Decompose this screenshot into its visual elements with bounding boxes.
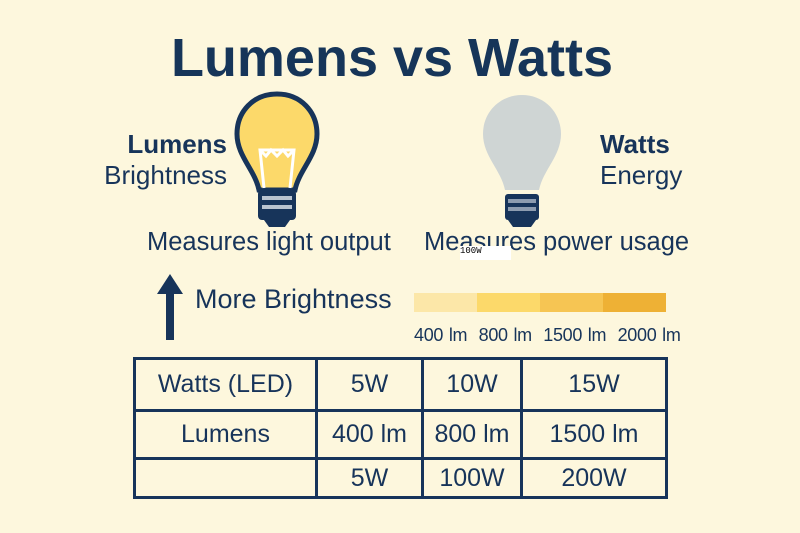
table: 400 lm xyxy=(332,420,407,448)
table xyxy=(133,357,668,499)
label: lumens brightness xyxy=(104,129,227,190)
table: 100W xyxy=(439,464,505,492)
title: Lumens vs Watts xyxy=(171,28,613,88)
table: 1500 lm xyxy=(550,420,638,448)
label: watts energy xyxy=(600,129,682,190)
table: 200W xyxy=(561,464,627,492)
label: lumens brightness: Lumens xyxy=(127,129,227,159)
label: lumens brightness: Brightness xyxy=(104,160,227,190)
table: 5W xyxy=(351,464,388,492)
icon: yellow bulb xyxy=(234,92,320,227)
brightness scale xyxy=(414,293,666,312)
table: Watts (LED) xyxy=(158,370,293,398)
label: watts energy: Energy xyxy=(600,160,682,190)
stray label 100W xyxy=(460,246,511,260)
table: 10W xyxy=(446,370,498,398)
table: 5W xyxy=(351,370,388,398)
table: Lumens xyxy=(181,420,270,448)
scale labels: 400 lm 800 lm 1500 lm 2000 lm xyxy=(414,325,681,345)
text: measures power usage: Measures power usage xyxy=(424,228,689,256)
table: 800 lm xyxy=(434,420,510,448)
label: watts energy: Watts xyxy=(600,129,670,159)
text: more brightness: More Brightness xyxy=(195,284,392,314)
arrow up xyxy=(157,274,183,340)
icon: grey bulb xyxy=(483,95,561,227)
text: measures light output: Measures light output xyxy=(147,228,391,256)
stray label 100W: 100W xyxy=(460,246,482,256)
table: 15W xyxy=(568,370,620,398)
